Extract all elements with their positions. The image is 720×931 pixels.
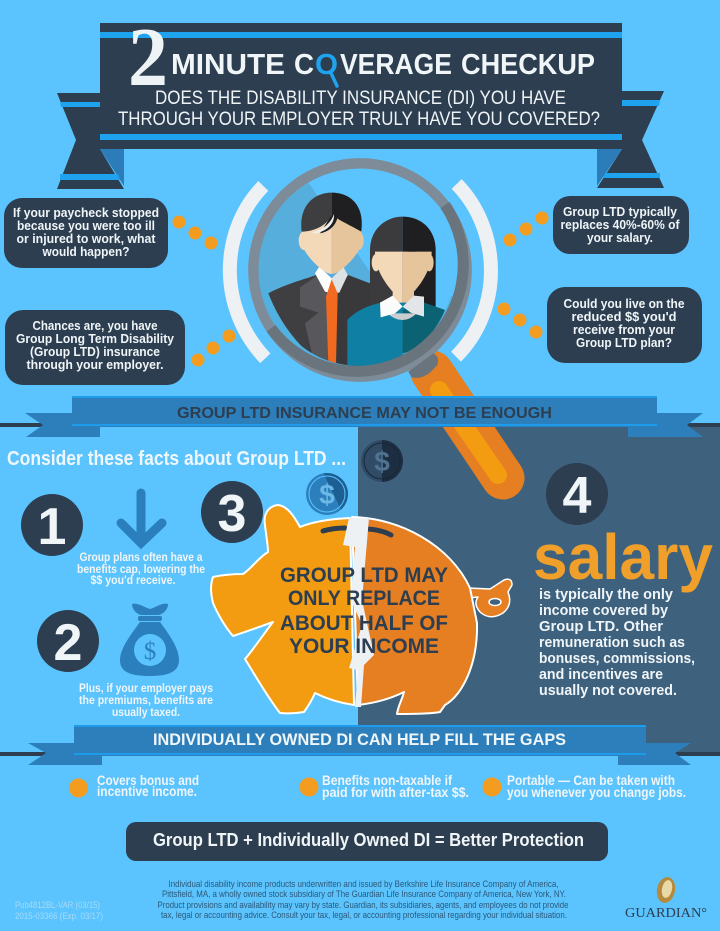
title: CHECKUP	[461, 49, 595, 81]
callout: paycheck: If your paycheck stopped	[13, 205, 159, 220]
pig text: YOUR INCOME	[289, 635, 439, 658]
title: MINUTE	[171, 49, 285, 81]
man	[268, 193, 370, 367]
pig text	[280, 564, 448, 658]
fact 2 text: Plus, if your employer pays	[79, 683, 213, 695]
publication code	[15, 900, 103, 922]
benefit: non-taxable: Benefits non-taxable if	[322, 773, 452, 788]
fact 2 text	[79, 683, 213, 719]
fact 4 text: usually not covered.	[539, 682, 677, 699]
fact 2 text: the premiums, benefits are	[79, 695, 213, 707]
title: O	[315, 49, 338, 81]
number 1	[21, 494, 83, 556]
disclaimer: tax, legal or accounting advice. Consult your tax, legal, or accounting professional regarding your individual situation.	[161, 910, 567, 921]
callout: paycheck	[4, 198, 168, 268]
pig text: ABOUT HALF OF	[280, 612, 448, 635]
callout: live on reduced	[547, 287, 702, 363]
callout: replaces salary: Group LTD typically	[563, 204, 678, 219]
heading: consider these facts: Consider these facts about Group LTD ...	[7, 448, 346, 470]
equation pill	[126, 822, 608, 861]
fact 4 text: is typically the only	[539, 586, 674, 603]
benefit: portable: you whenever you change jobs.	[507, 785, 686, 800]
salary word: salary	[533, 521, 713, 593]
fact 2 text: usually taxed.	[112, 707, 180, 719]
callout dots	[172, 212, 548, 366]
pig text: GROUP LTD MAY	[280, 564, 448, 587]
callout: live on reduced: receive from your	[573, 322, 675, 337]
callout: paycheck: would happen?	[42, 244, 130, 259]
fact 1 text: benefits cap, lowering the	[77, 564, 205, 576]
ribbon: group LTD may not be enough	[0, 396, 720, 437]
callout: chances are: (Group LTD) insurance	[30, 344, 160, 359]
coin slot	[323, 528, 391, 535]
disclaimer: Individual disability income products underwritten and issued by Berkshire Life Insurance Company of America,	[168, 879, 558, 890]
publication code: 2015-03366 (Exp. 03/17)	[15, 911, 103, 922]
fact 1 text: Group plans often have a	[80, 552, 203, 564]
benefit: covers bonus: Covers bonus and	[97, 773, 199, 788]
fact 4 text: remuneration such as	[539, 634, 685, 651]
fact 1 text	[77, 552, 205, 587]
fact 4 text: and incentives are	[539, 666, 663, 683]
header ribbon	[57, 23, 664, 189]
fact 4 text	[539, 586, 695, 699]
disclaimer	[158, 879, 568, 921]
callout: paycheck: or injured to work, what	[16, 231, 156, 246]
number 4	[546, 463, 608, 525]
callout: paycheck: because you were too ill	[17, 218, 155, 233]
callout: chances are: through your employer.	[26, 357, 164, 372]
callout: chances are	[5, 310, 185, 385]
ribbon: group LTD may not be enough: GROUP LTD INSURANCE MAY NOT BE ENOUGH	[177, 405, 552, 422]
subtitle: THROUGH YOUR EMPLOYER TRULY HAVE YOU COVERED?	[118, 109, 600, 130]
subtitle: DOES THE DISABILITY INSURANCE (DI) YOU HAVE	[155, 88, 566, 109]
benefit: covers bonus: incentive income.	[97, 784, 197, 799]
benefit: non-taxable: paid for with after-tax $$.	[322, 785, 469, 800]
callout: live on reduced: Could you live on the	[564, 296, 684, 311]
fact 4 text: bonuses, commissions,	[539, 650, 695, 667]
lens	[258, 182, 452, 366]
callout: live on reduced: reduced $$ you'd	[572, 309, 677, 324]
icon: money bag: $	[144, 638, 156, 665]
benefit: non-taxable	[300, 773, 469, 800]
white arcs	[230, 184, 491, 358]
piggy bank	[211, 505, 512, 714]
callout: replaces salary: replaces 40%-60% of	[560, 217, 680, 232]
number 3: 3	[218, 485, 246, 543]
fact 4 text: Group LTD. Other	[539, 618, 663, 635]
icon: magnifier handle	[432, 372, 503, 478]
Guardian logo: GUARDIAN°	[625, 906, 707, 921]
title: C	[294, 49, 314, 81]
callout: live on reduced: Group LTD plan?	[576, 335, 672, 350]
pig tail	[468, 579, 512, 617]
number 2: 2	[54, 614, 82, 672]
callout: replaces salary	[553, 196, 689, 254]
benefit: portable: Portable — Can be taken with	[507, 773, 675, 788]
lightning crack	[343, 518, 374, 707]
disclaimer: Pittsfield, MA, a wholly owned stock subsidiary of The Guardian Life Insurance Company of America, New York, NY.	[162, 889, 566, 900]
fact 4 text: income covered by	[539, 602, 669, 619]
number 3	[201, 481, 263, 543]
callout: chances are: Chances are, you have	[32, 318, 158, 333]
Guardian logo	[625, 875, 707, 921]
subtitle	[118, 88, 600, 130]
pig right half	[352, 517, 477, 714]
equation pill: Group LTD + Individually Owned DI = Better Protection	[153, 830, 584, 850]
icon: dark coin	[361, 440, 403, 482]
icon: down arrow	[121, 493, 162, 543]
woman	[347, 217, 445, 367]
number 4: 4	[563, 467, 592, 525]
publication code: Pub4812BL-VAR (03/15)	[15, 900, 100, 911]
benefit: covers bonus	[69, 773, 199, 799]
callout: replaces salary: your salary.	[587, 230, 653, 245]
pig left half	[211, 505, 354, 713]
icon: money bag	[120, 604, 179, 676]
title: 2	[128, 11, 168, 104]
magnifier with two people	[230, 163, 491, 383]
pig text: ONLY REPLACE	[288, 587, 440, 610]
panel: dark right background	[358, 423, 720, 755]
icon: dark coin: $	[374, 446, 390, 477]
callout: chances are: Group Long Term Disability	[16, 331, 175, 346]
number 2	[37, 610, 99, 672]
fact 1 text: $$ you'd receive.	[90, 575, 176, 587]
icon: blue coin	[306, 473, 348, 515]
icon: blue coin: $	[319, 479, 335, 510]
ribbon: individually owned	[0, 725, 720, 765]
title: VERAGE	[340, 49, 452, 81]
number 1: 1	[38, 498, 66, 556]
disclaimer: Product provisions and availability may vary by state. Guardian, its subsidiaries, agents, and employees do not provide	[158, 900, 568, 911]
title	[128, 11, 595, 104]
benefit: portable	[482, 773, 686, 800]
people	[268, 193, 445, 367]
ribbon: individually owned: INDIVIDUALLY OWNED DI CAN HELP FILL THE GAPS	[153, 730, 566, 749]
magnifier ring	[253, 163, 467, 378]
